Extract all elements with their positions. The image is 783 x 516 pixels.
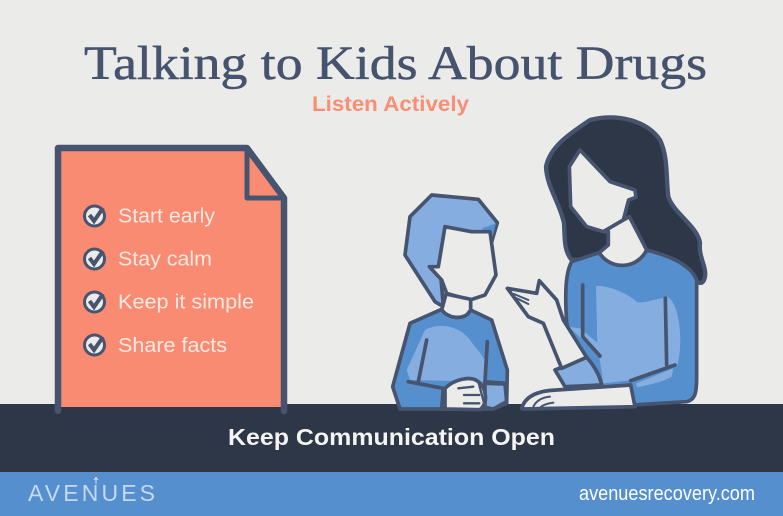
banner text: Keep Communication Open <box>228 424 555 450</box>
logo wordmark: AVENUES <box>28 480 155 506</box>
panel: checklist document <box>58 148 284 411</box>
left sleeve cuff <box>555 357 602 387</box>
footer bar: blue brand strip <box>0 472 783 516</box>
shirt <box>566 250 697 405</box>
website url: avenuesrecovery.com <box>579 483 755 505</box>
hair <box>546 117 705 283</box>
raised arm and hand <box>507 281 587 368</box>
checklist item: Keep it simple: Keep it simple <box>118 290 254 314</box>
checklist item: Stay calm: Stay calm <box>118 248 212 270</box>
checklist item: Start early: Start early <box>118 204 216 228</box>
checklist item: Share facts: Share facts <box>118 334 227 357</box>
illustration: mother <box>507 117 705 409</box>
page fold <box>247 148 284 198</box>
face <box>569 150 636 232</box>
resting arm and hand <box>522 385 635 409</box>
illustration: boy <box>393 195 507 410</box>
right sleeve line <box>631 365 675 381</box>
title: Talking to Kids About Drugs <box>84 37 707 90</box>
footer bar: dark banner <box>0 404 783 472</box>
shirt highlight <box>568 286 680 383</box>
neck <box>599 217 647 265</box>
subtitle: Listen Actively <box>312 93 469 116</box>
